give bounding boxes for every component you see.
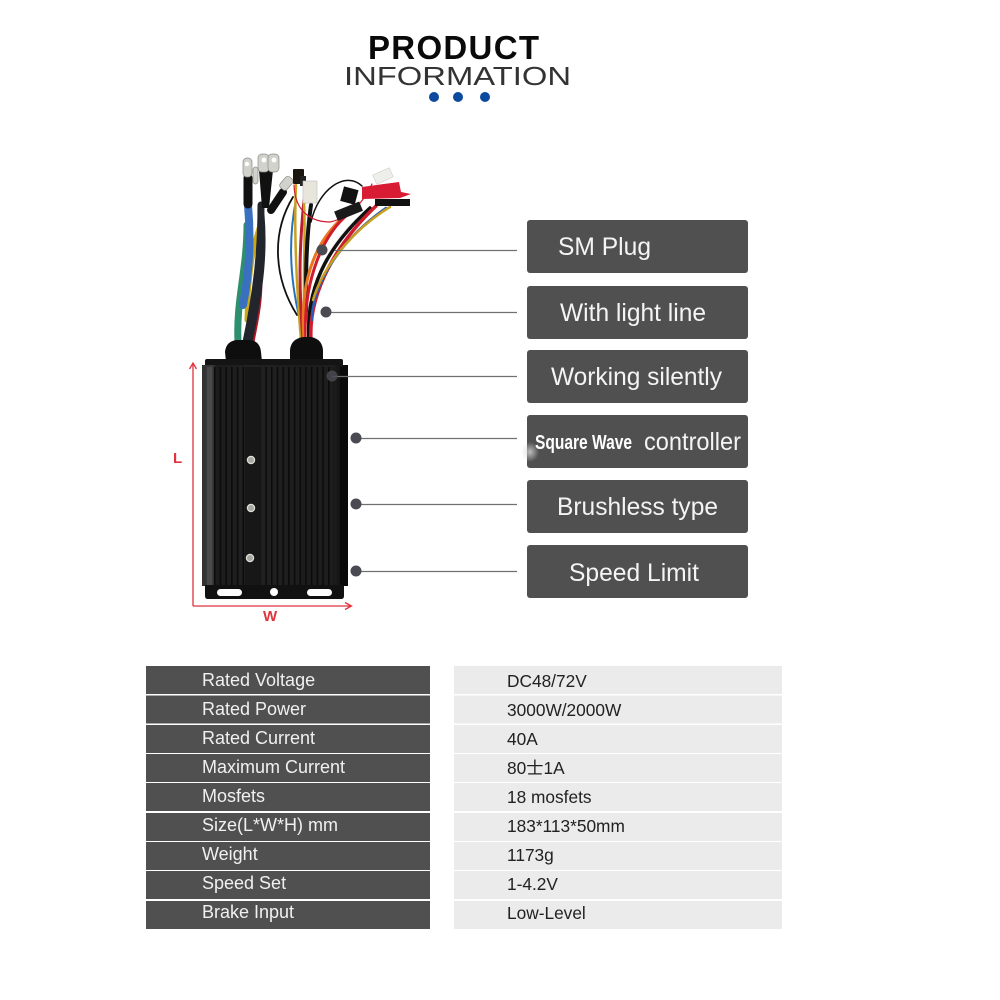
product photo: controller with wires <box>202 154 411 599</box>
feature button: Brushless type <box>527 480 748 533</box>
spec table: values: 40A <box>507 729 538 749</box>
spec table: labels <box>146 666 430 929</box>
spec table: values: 1173g <box>507 845 554 865</box>
spec table: values: 3000W/2000W <box>507 700 622 720</box>
feature button: Working silently: Working silently <box>551 363 722 391</box>
feature button: Working silently <box>527 350 748 403</box>
spec table: labels: Brake Input <box>202 902 294 922</box>
spec table: values: Low-Level <box>507 903 586 923</box>
feature button: Speed Limit <box>527 545 748 598</box>
spec table: labels: Weight <box>202 844 258 864</box>
feature button: Brushless type: Brushless type <box>557 493 718 521</box>
feature button: Square Wave controller: controller <box>644 428 741 456</box>
title: PRODUCT <box>368 29 539 66</box>
feature button: With light line <box>527 286 748 339</box>
spec table: values: 1-4.2V <box>507 874 558 894</box>
feature button: SM Plug: SM Plug <box>558 233 651 261</box>
dimension label W: W <box>263 608 278 625</box>
power cable bundle <box>238 154 294 342</box>
feature button: Square Wave controller <box>521 415 748 468</box>
signal wire bundle <box>278 180 390 340</box>
mounting flange <box>205 585 344 599</box>
dimension arrows <box>190 363 352 610</box>
spec table: labels: Rated Voltage <box>202 670 315 690</box>
connectors <box>293 168 411 221</box>
spec table: labels: Size(L*W*H) mm <box>202 815 338 835</box>
spec table: labels: Mosfets <box>202 786 265 806</box>
spec table: values <box>454 666 782 929</box>
aluminium housing <box>202 359 348 599</box>
spec table: values: 18 mosfets <box>507 787 592 807</box>
title <box>344 29 571 91</box>
spec table: values: DC48/72V <box>507 671 587 691</box>
feature button: With light line: With light line <box>560 299 706 327</box>
spec table: labels: Speed Set <box>202 873 286 893</box>
spec table: labels: Rated Current <box>202 728 315 748</box>
screws <box>246 456 255 562</box>
cable glands <box>225 337 323 362</box>
feature button: Speed Limit: Speed Limit <box>569 559 699 587</box>
callout lines and markers <box>316 244 517 576</box>
spec table: labels: Rated Power <box>202 699 306 719</box>
spec table: labels: Maximum Current <box>202 757 345 777</box>
title: INFORMATION <box>344 61 571 91</box>
feature button: SM Plug <box>527 220 748 273</box>
spec table: values: 183*113*50mm <box>507 816 625 836</box>
spec table: values: 80士1A <box>507 758 565 778</box>
lugs <box>243 154 294 192</box>
title dots <box>429 92 490 102</box>
dimension label L: L <box>173 450 182 467</box>
feature button: Square Wave controller: Square Wave <box>535 432 632 454</box>
